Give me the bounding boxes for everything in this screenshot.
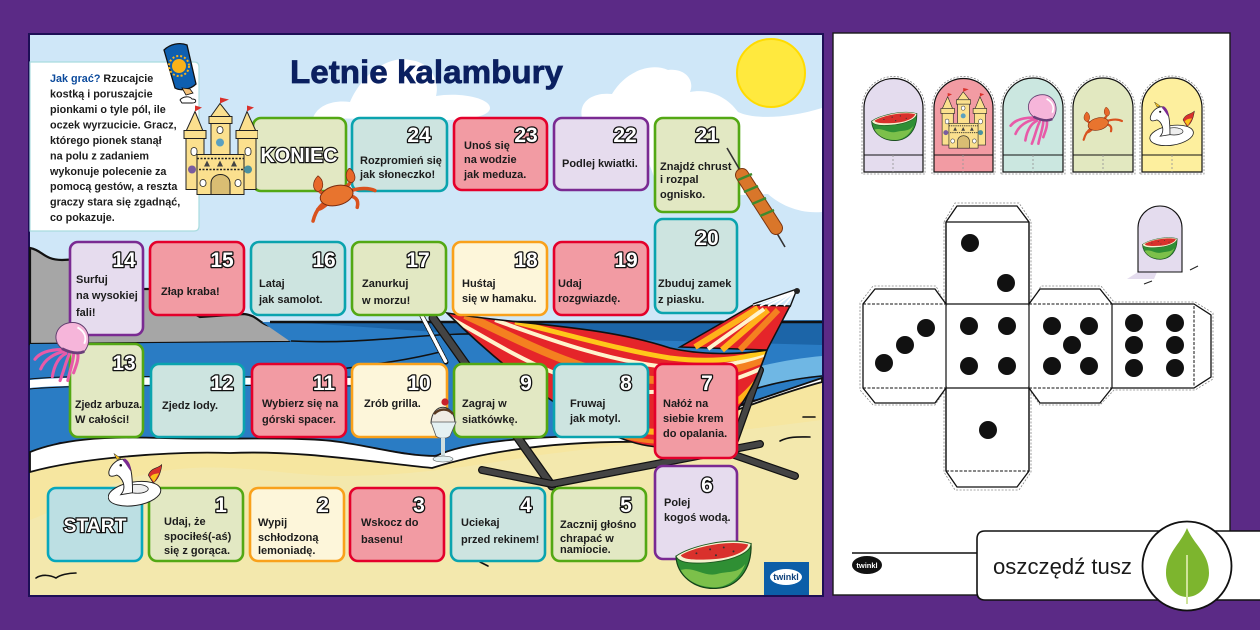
square 1: spociłeś(-aś) bbox=[164, 531, 232, 543]
foam bbox=[30, 378, 822, 472]
square 20: Zbuduj zamek bbox=[658, 278, 732, 290]
square 3: basenu! bbox=[361, 534, 403, 546]
square: START: START bbox=[64, 516, 127, 537]
square 3: Wskocz do bbox=[361, 517, 419, 529]
square 21: ognisko. bbox=[660, 189, 705, 201]
square 1: Udaj, że bbox=[164, 516, 206, 528]
square 9: Zagraj w bbox=[462, 398, 507, 410]
square 9 bbox=[454, 364, 547, 437]
square 20: 20 bbox=[695, 227, 719, 250]
twinkl footer logo bbox=[852, 556, 882, 574]
square 4: przed rekinem! bbox=[461, 534, 539, 546]
icon: ice cream sundae bbox=[431, 398, 456, 462]
dice outline bbox=[863, 206, 1211, 487]
dice net bbox=[860, 203, 1213, 490]
square 11: górski spacer. bbox=[262, 414, 336, 426]
square 23: na wodzie bbox=[464, 154, 517, 166]
square 3: 3 bbox=[413, 494, 425, 517]
instructions text: pionkami o tyle pól, ile bbox=[50, 104, 166, 116]
square 3 bbox=[350, 488, 444, 561]
square 17 bbox=[352, 242, 446, 315]
square 6 bbox=[655, 466, 737, 559]
square 17: Zanurkuj bbox=[362, 278, 408, 290]
square 22: 22 bbox=[613, 124, 637, 147]
die face two bbox=[961, 234, 1015, 292]
pawn: unicorn bbox=[1140, 76, 1204, 174]
square 4 bbox=[451, 488, 545, 561]
dice cut line bbox=[860, 203, 1213, 490]
square 19 bbox=[554, 242, 648, 315]
square 5: namiocie. bbox=[560, 544, 611, 556]
square 8 bbox=[554, 364, 648, 437]
sand bbox=[30, 382, 822, 595]
square: START bbox=[48, 488, 142, 561]
square 16 bbox=[251, 242, 345, 315]
instructions box bbox=[30, 62, 199, 231]
square 21: 21 bbox=[695, 124, 719, 147]
panel: printable page bbox=[833, 33, 1230, 595]
square: KONIEC bbox=[253, 118, 346, 191]
square 5 bbox=[552, 488, 646, 561]
square 23: Unoś się bbox=[464, 140, 510, 152]
square 7: 7 bbox=[701, 372, 713, 395]
square 13: W całości! bbox=[75, 414, 129, 426]
square 9: 9 bbox=[520, 372, 532, 395]
square 10 bbox=[352, 364, 447, 437]
square 16: jak samolot. bbox=[258, 294, 323, 306]
square 19: 19 bbox=[614, 249, 638, 272]
square 10: 10 bbox=[407, 372, 431, 395]
instructions text: wykonuje polecenie za bbox=[49, 166, 167, 178]
square 7 bbox=[655, 364, 737, 458]
hammock back bbox=[680, 288, 800, 350]
square 21: Znajdź chrust bbox=[660, 161, 732, 173]
square 1: się z gorąca. bbox=[164, 545, 230, 557]
sea horizon bands bbox=[30, 322, 822, 392]
instructions text: Jak grać? Rzucajcie bbox=[50, 73, 153, 85]
square 2: lemoniadę. bbox=[258, 545, 315, 557]
square 23 bbox=[454, 118, 547, 190]
square 12: Zjedz lody. bbox=[162, 400, 218, 412]
icon: skewer bbox=[727, 148, 785, 247]
clouds bbox=[313, 59, 822, 212]
die face five bbox=[1043, 317, 1098, 375]
square 13: Zjedz arbuza. bbox=[75, 399, 142, 411]
square 14: 14 bbox=[112, 249, 136, 272]
square 5: Zacznij głośno bbox=[560, 519, 637, 531]
square 24 bbox=[352, 118, 447, 191]
square 16: Lataj bbox=[259, 278, 285, 290]
square 24: Rozpromień się bbox=[360, 155, 442, 167]
square 7: siebie krem bbox=[663, 413, 724, 425]
square 22 bbox=[554, 118, 648, 190]
square 9: siatkówkę. bbox=[462, 414, 518, 426]
square 8: jak motyl. bbox=[569, 413, 621, 425]
badge label: oszczędź tusz bbox=[993, 554, 1132, 579]
sun bbox=[737, 39, 805, 107]
icon: crab bbox=[313, 168, 375, 221]
square 2: Wypij bbox=[258, 517, 287, 529]
icon: jellyfish bbox=[35, 323, 89, 381]
square 6: Polej bbox=[664, 497, 690, 509]
square 6: kogoś wodą. bbox=[664, 512, 731, 524]
square 6: 6 bbox=[701, 474, 713, 497]
instructions text: oczek wyrzucicie. Gracz, bbox=[50, 120, 177, 132]
die face one bbox=[979, 421, 997, 439]
square 20: z piasku. bbox=[658, 294, 704, 306]
square 4: 4 bbox=[520, 494, 532, 517]
twinkl logo: twinkl bbox=[773, 572, 799, 582]
page bbox=[833, 33, 1230, 595]
icon: watermelon bbox=[676, 541, 751, 588]
square 1: 1 bbox=[215, 494, 227, 517]
board frame bbox=[28, 33, 824, 597]
square 22: Podlej kwiatki. bbox=[562, 158, 638, 170]
instructions text: którego pionek stanął bbox=[50, 135, 162, 147]
square 7: do opalania. bbox=[663, 428, 727, 440]
square 18 bbox=[453, 242, 547, 315]
square 8: Fruwaj bbox=[570, 398, 605, 410]
square 18: się w hamaku. bbox=[462, 293, 537, 305]
icon: unicorn float bbox=[106, 453, 163, 510]
instructions text: kostką i poruszajcie bbox=[50, 88, 153, 100]
die face three bbox=[875, 319, 935, 372]
square 19: Udaj bbox=[558, 278, 582, 290]
square 12: 12 bbox=[210, 372, 234, 395]
instructions text: co pokazuje. bbox=[50, 212, 115, 224]
square 7: Nałóż na bbox=[663, 398, 709, 410]
sea bbox=[30, 320, 822, 456]
square 17: 17 bbox=[406, 249, 430, 272]
square 20 bbox=[655, 219, 737, 313]
square 24: 24 bbox=[407, 124, 431, 147]
icon: leaf bbox=[1142, 522, 1232, 610]
square 2 bbox=[250, 488, 344, 561]
square 14: Surfuj bbox=[76, 274, 108, 286]
square 18: 18 bbox=[514, 249, 538, 272]
badge box bbox=[977, 531, 1260, 600]
square 11 bbox=[252, 364, 346, 437]
square: KONIEC: KONIEC bbox=[260, 145, 338, 167]
pawn: jellyfish bbox=[1001, 76, 1065, 174]
square 10: Zrób grilla. bbox=[364, 398, 421, 410]
seagulls bbox=[36, 417, 815, 578]
square 23: 23 bbox=[514, 124, 538, 147]
board squares bbox=[48, 118, 739, 561]
square 5: 5 bbox=[620, 494, 632, 517]
pawn: castle bbox=[932, 77, 995, 174]
square 2: schłodzoną bbox=[258, 532, 319, 544]
instructions text: na polu z zadaniem bbox=[50, 150, 149, 162]
panel: game board bbox=[28, 33, 824, 597]
square 1 bbox=[149, 488, 243, 561]
square 14 bbox=[70, 242, 143, 335]
square 13: 13 bbox=[112, 352, 136, 375]
dice fold lines bbox=[946, 222, 1112, 471]
square 15 bbox=[150, 242, 244, 315]
square 13 bbox=[70, 344, 143, 437]
icon: sun cream bottle bbox=[164, 44, 196, 103]
die face six bbox=[1125, 314, 1184, 377]
folded pawn example bbox=[1127, 206, 1198, 284]
square 11: Wybierz się na bbox=[262, 398, 339, 410]
square 18: Huśtaj bbox=[462, 278, 496, 290]
square 21: i rozpal bbox=[660, 174, 699, 186]
twinkl footer logo: twinkl bbox=[856, 561, 878, 570]
square 11: 11 bbox=[313, 372, 335, 395]
die face four bbox=[960, 317, 1016, 375]
square 24: jak słoneczko! bbox=[359, 169, 435, 181]
pawn: watermelon bbox=[862, 77, 925, 174]
square 14: fali! bbox=[76, 307, 96, 319]
mountain bbox=[30, 248, 291, 344]
square 15: Złap kraba! bbox=[161, 286, 220, 298]
square 4: Uciekaj bbox=[461, 517, 500, 529]
square 23: jak meduza. bbox=[463, 169, 526, 181]
instructions text: graczy stara się zgadnąć, bbox=[50, 196, 180, 208]
instructions text: pomocą gestów, a reszta bbox=[50, 181, 178, 193]
sky bbox=[30, 35, 822, 325]
ink-saver badge bbox=[977, 522, 1260, 610]
twinkl logo bbox=[764, 562, 809, 595]
square 19: rozgwiazdę. bbox=[558, 293, 620, 305]
title: Letnie kalambury bbox=[290, 54, 563, 90]
square 5: chrapać w bbox=[560, 533, 614, 545]
square 12 bbox=[151, 364, 244, 437]
panel: how to play bbox=[30, 62, 199, 231]
hammock cloth bbox=[445, 313, 775, 447]
square 16: 16 bbox=[312, 249, 336, 272]
hammock frame bbox=[422, 316, 795, 486]
square 17: w morzu! bbox=[361, 295, 410, 307]
square 21 bbox=[655, 118, 739, 212]
square 8: 8 bbox=[620, 372, 632, 395]
icon: sandcastle bbox=[184, 98, 258, 194]
square 2: 2 bbox=[317, 494, 329, 517]
pawn: crab bbox=[1071, 76, 1135, 174]
footer rule bbox=[852, 552, 980, 554]
square 15: 15 bbox=[210, 249, 234, 272]
square 14: na wysokiej bbox=[76, 290, 138, 302]
